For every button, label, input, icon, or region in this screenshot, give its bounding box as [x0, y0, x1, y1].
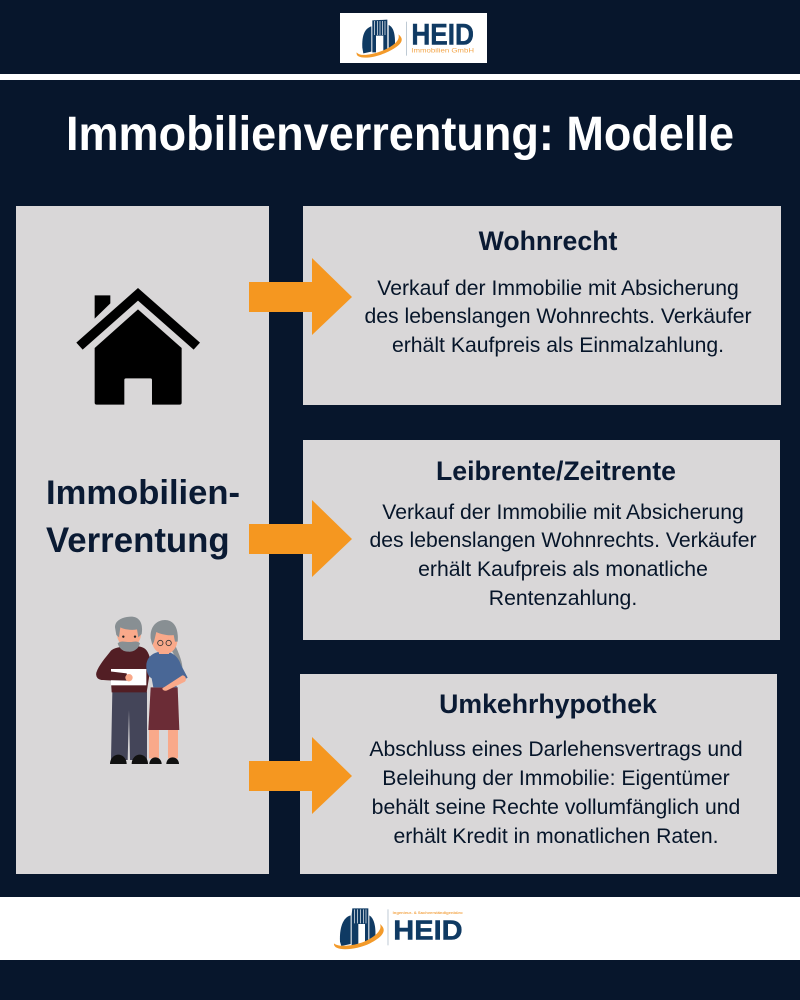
panel: Leibrente/Zeitrente: Leibrente/Zeitrente [436, 456, 676, 486]
panel: Leibrente/Zeitrente: Rentenzahlung. [489, 587, 637, 610]
panel: Umkehrhypothek: Umkehrhypothek [439, 689, 657, 719]
footer logo [334, 908, 463, 949]
panel: Leibrente/Zeitrente [303, 440, 780, 640]
header logo: HEID [411, 18, 474, 51]
arrow: to Leibrente/Zeitrente [249, 500, 352, 577]
panel: Wohnrecht: erhält Kaufpreis als Einmalzahlung. [392, 334, 724, 357]
panel: Leibrente/Zeitrente: des lebenslangen Wohnrechts. Verkäufer [369, 529, 757, 552]
footer logo: HEID [393, 915, 463, 946]
panel: Leibrente/Zeitrente: erhält Kaufpreis als monatliche [418, 558, 708, 581]
panel: left column [16, 206, 269, 874]
panel: Umkehrhypothek: Beleihung der Immobilie: Eigentümer [382, 767, 730, 790]
panel: Umkehrhypothek: behält seine Rechte vollumfänglich und [372, 796, 740, 819]
panel: Wohnrecht: Verkauf der Immobilie mit Absicherung [377, 277, 739, 300]
icon: house [76, 288, 200, 405]
panel: Wohnrecht: des lebenslangen Wohnrechts. Verkäufer [364, 305, 752, 328]
panel: Wohnrecht [303, 206, 781, 405]
panel: left column: Verrentung [46, 521, 230, 560]
arrow: to Wohnrecht [249, 258, 352, 335]
panel: Umkehrhypothek: erhält Kredit in monatlichen Raten. [393, 825, 719, 848]
title: Immobilienverrentung: Modelle [66, 108, 734, 161]
panel: Umkehrhypothek [300, 674, 777, 874]
footer band [0, 897, 800, 960]
panel: Leibrente/Zeitrente: Verkauf der Immobilie mit Absicherung [382, 501, 744, 524]
footer logo: Ingenieur- & Sachverständigenbüro [393, 910, 463, 915]
header logo: Immobilien GmbH [411, 48, 474, 55]
panel: Wohnrecht: Wohnrecht [479, 226, 617, 256]
left heading: Immobilien- [46, 474, 240, 512]
icon: elderly couple [96, 617, 188, 764]
header logo [340, 13, 487, 63]
arrow: to Umkehrhypothek [249, 737, 352, 814]
panel: Umkehrhypothek: Abschluss eines Darlehensvertrags und [369, 738, 743, 761]
